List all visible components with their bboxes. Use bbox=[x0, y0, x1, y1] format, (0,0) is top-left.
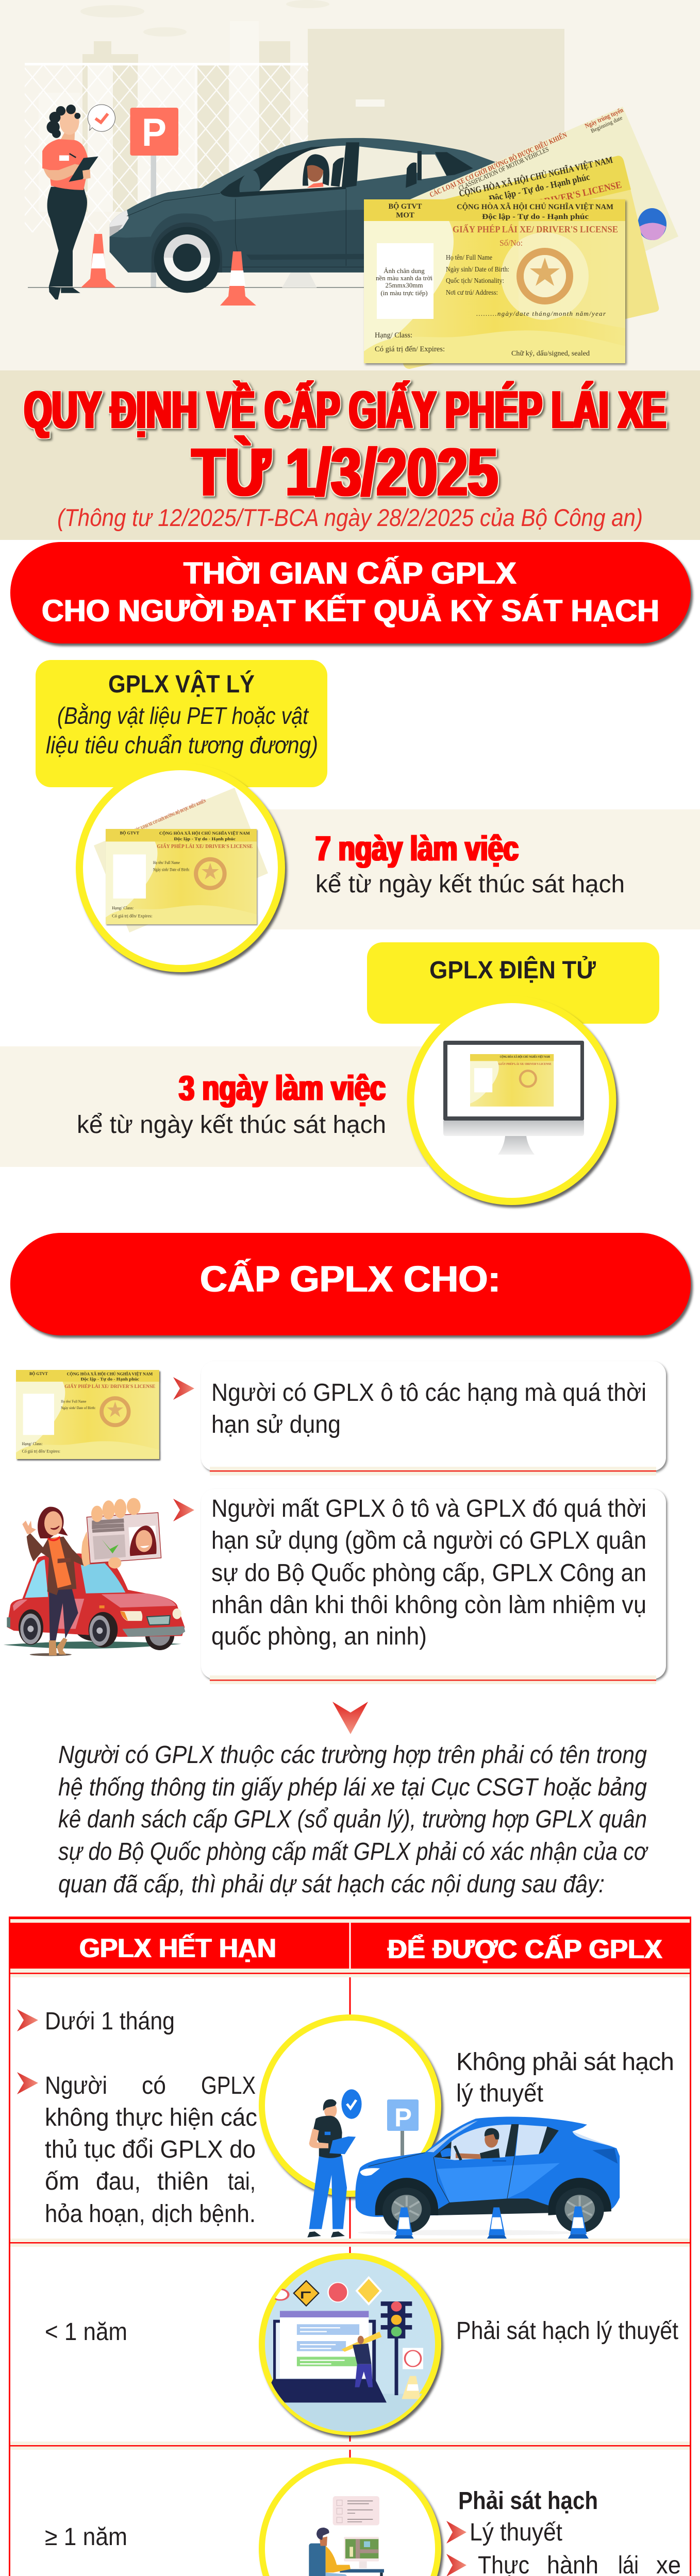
arrow bbox=[17, 2009, 38, 2031]
text card: hạn sử dụng bbox=[211, 1411, 341, 1438]
panel: physical licence bbox=[36, 660, 700, 969]
licence card image: BỘ GTVT bbox=[29, 1371, 48, 1376]
text card: quốc phòng, an ninh) bbox=[211, 1623, 427, 1650]
back licence card: Beginning date bbox=[590, 115, 624, 134]
front licence card: Có giá trị đến/ Expires: bbox=[375, 345, 445, 353]
arrow bbox=[17, 2072, 38, 2094]
blue car wheels bbox=[375, 2178, 611, 2233]
table header: GPLX HẾT HẠN bbox=[79, 1933, 276, 1963]
table header: ĐỂ ĐƯỢC CẤP GPLX bbox=[388, 1934, 662, 1964]
circle: person at computer bbox=[262, 2461, 438, 2576]
circle bbox=[262, 2018, 438, 2194]
blue parking sign bbox=[387, 2099, 419, 2156]
licence card image: Độc lập - Tự do - Hạnh phúc bbox=[80, 1377, 139, 1382]
text: special cases: không thực hiện các bbox=[45, 2104, 257, 2131]
title line 2: TỪ 1/3/2025 bbox=[192, 434, 498, 510]
car illustration bbox=[110, 138, 498, 293]
front licence card: nền màu xanh da trời bbox=[376, 274, 432, 282]
heading: issuing time: CHO NGƯỜI ĐẠT KẾT QUẢ KỲ SÁT HẠCH bbox=[42, 594, 659, 628]
result text bbox=[456, 2048, 674, 2107]
label: under 1 year: < 1 năm bbox=[45, 2318, 127, 2346]
yellow label: electronic licence: GPLX ĐIỆN TỬ bbox=[429, 956, 596, 984]
list item: expired licence bbox=[16, 1361, 666, 1476]
text: special cases: thủ tục đổi GPLX do bbox=[45, 2136, 256, 2163]
front licence card: CỘNG HÒA XÃ HỘI CHỦ NGHĨA VIỆT NAM bbox=[457, 202, 613, 211]
heading: issuing time bbox=[10, 542, 691, 643]
arrow bbox=[173, 1377, 194, 1400]
circle: licence card: GIẤY PHÉP LÁI XE/ DRIVER'S LICENSE bbox=[157, 843, 253, 850]
text card bbox=[201, 1361, 666, 1476]
table row: over 1 year bbox=[28, 2461, 688, 2576]
text: special cases: đau, bbox=[96, 2168, 141, 2195]
band: 7 working days: 7 ngày làm việc bbox=[315, 829, 519, 868]
front licence card: Chữ ký, dấu/signed, sealed bbox=[511, 350, 590, 358]
circle: computer monitor: CỘNG HÒA XÃ HỘI CHỦ NGHĨA VIỆT NAM bbox=[500, 1055, 550, 1059]
speech bubble with tick bbox=[88, 105, 115, 131]
title band bbox=[0, 370, 700, 540]
front licence card: Ảnh chân dung bbox=[384, 267, 425, 275]
row divider bbox=[10, 2239, 690, 2247]
text card: nhân dân khi thôi không còn làm nhiệm vụ bbox=[211, 1591, 646, 1619]
circle: licence card: Ngày sinh/ Date of Birth: bbox=[153, 867, 190, 872]
woman with clipboard bbox=[42, 105, 98, 299]
result: tests required: Lý thuyết bbox=[470, 2519, 562, 2546]
licence card image: Có giá trị đến/ Expires: bbox=[22, 1449, 60, 1453]
yellow label: electronic licence bbox=[367, 942, 659, 1024]
band: 7 working days bbox=[180, 809, 700, 929]
circle: licence card: BỘ GTVT bbox=[120, 830, 139, 835]
circle: licence card: Có giá trị đến/ Expires: bbox=[112, 913, 153, 919]
blue parking sign: P bbox=[394, 2103, 412, 2132]
licence card image: GIẤY PHÉP LÁI XE/ DRIVER'S LICENSE bbox=[64, 1383, 156, 1389]
heading: issue licence for: CẤP GPLX CHO: bbox=[200, 1259, 501, 1300]
arrow bbox=[173, 1499, 194, 1521]
label: under 1 month: Dưới 1 tháng bbox=[45, 2008, 175, 2035]
text: special cases bbox=[45, 2072, 257, 2228]
result: tests required: Phải sát hạch bbox=[458, 2487, 598, 2515]
yellow label: physical licence: GPLX VẬT LÝ bbox=[108, 670, 255, 698]
front licence card: Họ tên/ Full Name bbox=[446, 254, 492, 262]
back licence card: CÁC LOẠI XE CƠ GIỚI ĐƯỜNG BỘ ĐƯỢC ĐIỀU KHIỂN bbox=[428, 130, 569, 199]
text block: conditions: quan đã cấp, thì phải dự sát hạch các nội dung sau đây: bbox=[58, 1871, 605, 1898]
text card: Người mất GPLX ô tô và GPLX đó quá thời bbox=[211, 1495, 646, 1522]
front licence card: Số/No: bbox=[499, 238, 523, 248]
blue car with driver and cones bbox=[307, 2089, 620, 2241]
heading: issue licence for bbox=[10, 1233, 691, 1335]
text card: sự do Bộ Quốc phòng cấp, GPLX Công an bbox=[211, 1560, 646, 1587]
traffic cones bbox=[81, 234, 256, 306]
result text: Không phải sát hạch bbox=[456, 2048, 674, 2076]
man holding folder bbox=[307, 2099, 356, 2238]
circle: licence card bbox=[79, 767, 281, 969]
text: special cases: hỏa hoạn, dịch bệnh. bbox=[45, 2200, 256, 2228]
label: over 1 year: ≥ 1 năm bbox=[45, 2523, 127, 2551]
heading: issuing time: THỜI GIAN CẤP GPLX bbox=[184, 556, 516, 590]
licence card image: Hạng/ Class: bbox=[22, 1442, 43, 1446]
text card: hạn sử dụng (gồm cả người có GPLX quân bbox=[211, 1527, 646, 1554]
front licence card: Quốc tịch/ Nationality: bbox=[446, 277, 504, 285]
panel: electronic licence bbox=[0, 942, 659, 1201]
result: tests required bbox=[446, 2487, 681, 2576]
circle: licence card: Độc lập - Tự do - Hạnh phúc bbox=[174, 836, 236, 841]
middle licence card: Độc lập - Tự do - Hạnh phúc bbox=[488, 172, 591, 204]
driver bbox=[303, 154, 329, 188]
front licence card: MOT bbox=[396, 211, 414, 219]
front licence card: (in màu trực tiếp) bbox=[380, 289, 428, 297]
front licence card: Ngày sinh/ Date of Birth: bbox=[446, 266, 509, 274]
band: 3 working days: kể từ ngày kết thúc sát hạch bbox=[77, 1111, 386, 1139]
text card bbox=[201, 1489, 666, 1684]
car wheel bbox=[152, 223, 222, 293]
band: 3 working days: 3 ngày làm việc bbox=[179, 1069, 386, 1108]
text: special cases: Người bbox=[45, 2072, 107, 2099]
text card: Người có GPLX ô tô các hạng mà quá thời bbox=[211, 1379, 646, 1406]
text: special cases: tai, bbox=[228, 2168, 256, 2195]
illustration: stacked licence cards bbox=[364, 106, 678, 369]
middle licence card bbox=[366, 154, 659, 369]
licence held up bbox=[81, 1498, 161, 1569]
blue car driver bbox=[455, 2128, 500, 2160]
circle: licence card: Hạng/ Class: bbox=[112, 905, 134, 910]
parking sign: P bbox=[142, 111, 166, 155]
parking sign bbox=[130, 108, 178, 287]
panel: header illustration bbox=[0, 0, 700, 370]
table row: under 1 year bbox=[45, 2256, 678, 2438]
licence card image: CỘNG HÒA XÃ HỘI CHỦ NGHĨA VIỆT NAM bbox=[67, 1371, 153, 1376]
circle: computer monitor: GIẤY PHÉP LÁI XE/ DRIVER'S LICENSE bbox=[498, 1062, 552, 1066]
circle: road signs and laptop bbox=[261, 2256, 438, 2438]
circle: licence card: CỘNG HÒA XÃ HỘI CHỦ NGHĨA VIỆT NAM bbox=[159, 831, 250, 836]
blue check bubble bbox=[341, 2089, 362, 2119]
band: 3 working days bbox=[0, 1046, 428, 1167]
front licence card: BỘ GTVT bbox=[389, 202, 422, 211]
text block: conditions: Người có GPLX thuộc các trường hợp trên phải có tên trong bbox=[58, 1741, 647, 1769]
text: special cases: thiên bbox=[157, 2168, 209, 2195]
back licence card: CLASSIFICATION OF MOTOR VEHICLES bbox=[457, 145, 550, 192]
row divider bbox=[10, 2442, 690, 2450]
yellow label: physical licence: liệu tiêu chuẩn tương đương) bbox=[46, 732, 318, 758]
text: special cases: có bbox=[142, 2072, 166, 2099]
front licence card bbox=[364, 199, 625, 363]
middle licence card: GIẤY PHÉP LÁI XE/ DRIVER'S LICENSE bbox=[452, 179, 623, 228]
circle: licence card: CÁC LOẠI XE CƠ GIỚI ĐƯỜNG BỘ ĐƯỢC ĐIỀU KHIỂN bbox=[134, 798, 207, 833]
list item: lost licence bbox=[4, 1489, 666, 1684]
text block: conditions: hệ thống thông tin giấy phép lái xe tại Cục CSGT hoặc bảng bbox=[58, 1774, 647, 1801]
band: 7 working days: kể từ ngày kết thúc sát hạch bbox=[315, 871, 625, 898]
arrow: down bbox=[332, 1702, 368, 1734]
text block: conditions bbox=[58, 1741, 648, 1898]
table frame bbox=[9, 1917, 691, 2576]
table header bbox=[10, 1919, 690, 1977]
licence card image: Họ tên/ Full Name bbox=[61, 1399, 87, 1404]
front licence card: GIẤY PHÉP LÁI XE/ DRIVER'S LICENSE bbox=[453, 224, 618, 234]
woman figure bbox=[22, 1507, 84, 1655]
licence card image: Ngày sinh/ Date of Birth: bbox=[61, 1405, 96, 1410]
circle: licence card: Họ tên/ Full Name bbox=[153, 860, 180, 865]
yellow label: physical licence bbox=[36, 660, 327, 787]
text: special cases: GPLX bbox=[201, 2072, 256, 2099]
illustration: woman and red car bbox=[4, 1498, 185, 1656]
circle: computer monitor bbox=[410, 999, 612, 1201]
front licence card: Hạng/ Class: bbox=[375, 331, 412, 340]
back licence card bbox=[377, 106, 678, 309]
table row: under 1 month bbox=[17, 2008, 674, 2241]
result: theory test: Phải sát hạch lý thuyết bbox=[456, 2317, 678, 2345]
front licence card: Độc lập - Tự do - Hạnh phúc bbox=[482, 213, 589, 221]
text: special cases: ốm bbox=[45, 2168, 79, 2195]
middle licence card: CỘNG HÒA XÃ HỘI CHỦ NGHĨA VIỆT NAM bbox=[458, 154, 614, 199]
front licence card: 25mmx30mm bbox=[386, 281, 423, 289]
result text: lý thuyết bbox=[456, 2080, 543, 2107]
front licence card: .........ngày/date tháng/month năm/year bbox=[476, 310, 606, 317]
column divider bbox=[349, 1977, 351, 2576]
front licence card: Nơi cư trú/ Address: bbox=[446, 289, 498, 297]
licence card image bbox=[16, 1370, 159, 1459]
yellow label: physical licence: (Bằng vật liệu PET hoặc vật bbox=[57, 702, 309, 729]
back licence card: Ngày trúng tuyển bbox=[584, 106, 625, 130]
subtitle: (Thông tư 12/2025/TT-BCA ngày 28/2/2025 của Bộ Công an) bbox=[57, 504, 643, 531]
blue cones bbox=[393, 2207, 590, 2241]
ground line bbox=[28, 287, 364, 288]
